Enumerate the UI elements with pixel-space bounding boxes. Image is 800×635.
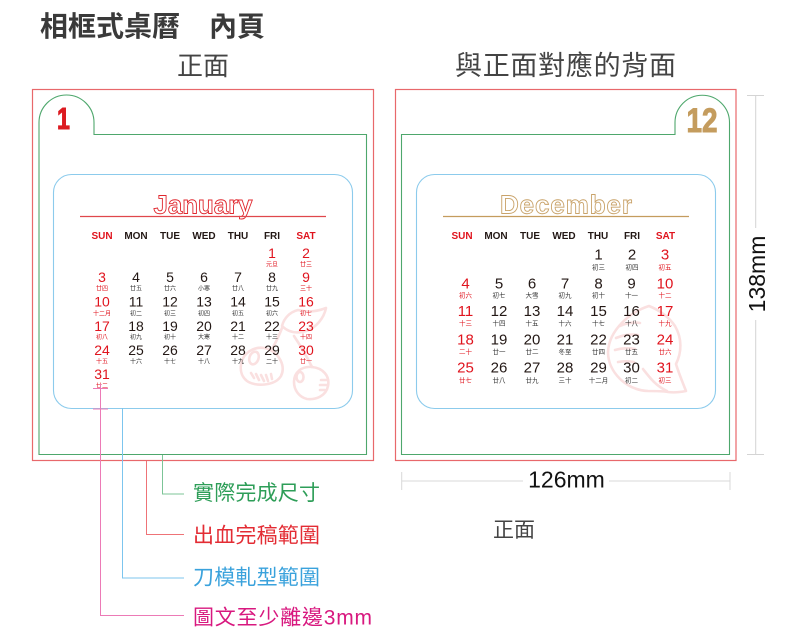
- bleed outline: [32, 90, 374, 460]
- date grid: January: 初九: [130, 333, 142, 341]
- date grid: January: 初四: [198, 310, 210, 318]
- legend: 3mm safety margin: 圖文至少離邊3mm: [193, 606, 372, 630]
- date grid: December: 初三: [658, 376, 672, 384]
- legend: trim size: [162, 455, 320, 505]
- date grid: December: [457, 246, 673, 384]
- date grid: December: 十九: [658, 318, 672, 328]
- date grid: December: 初七: [492, 290, 506, 300]
- watermark: peach: [608, 306, 686, 392]
- date grid: January: 廿一: [300, 358, 312, 366]
- weekday header: SUN: [451, 231, 473, 242]
- date grid: December: 十八: [625, 318, 638, 328]
- date grid: December: 廿九: [526, 376, 539, 384]
- weekday header: FRI: [624, 231, 640, 242]
- date grid: December: 31: [657, 360, 673, 376]
- weekday header: WED: [552, 231, 576, 242]
- date grid: January: 15: [264, 294, 280, 310]
- date grid: December: 8: [594, 276, 603, 292]
- date grid: January: 初五: [232, 310, 244, 318]
- legend: die-cut area: [122, 408, 320, 590]
- date grid: December: 21: [557, 332, 573, 348]
- weekday header: MON: [484, 231, 508, 242]
- date grid: January: 元旦: [266, 262, 278, 268]
- legend: trim size: 實際完成尺寸: [193, 482, 320, 505]
- date grid: December: 12: [491, 303, 507, 320]
- date grid: January: 1: [268, 245, 276, 261]
- date grid: December: 十一: [625, 290, 638, 300]
- date grid: December: 廿一: [492, 347, 506, 356]
- date grid: December: 17: [657, 303, 673, 320]
- date grid: December: 14: [557, 303, 573, 320]
- date grid: December: 20: [524, 332, 540, 348]
- watermark: cherries: [241, 308, 328, 399]
- date grid: December: 10: [657, 276, 673, 292]
- date grid: January: 十九: [232, 358, 244, 366]
- die-cut outline: [416, 174, 716, 408]
- date grid: December: 16: [623, 303, 640, 320]
- date grid: December: 冬至: [558, 347, 572, 356]
- date grid: January: 十二月: [93, 310, 111, 318]
- date grid: December: 4: [461, 276, 470, 292]
- date grid: January: 23: [298, 318, 314, 334]
- weekday header: SAT: [656, 231, 675, 242]
- date grid: January: 十四: [300, 333, 312, 341]
- date grid: December: 十二: [658, 290, 672, 300]
- weekday header: TUE: [520, 231, 540, 242]
- date grid: January: 初二: [130, 310, 142, 318]
- date grid: January: 2: [302, 245, 310, 261]
- date grid: January: 4: [132, 269, 140, 285]
- title: 相框式桌曆: [40, 11, 180, 42]
- date grid: January: 17: [94, 318, 110, 334]
- date grid: December: 二十: [459, 347, 472, 356]
- date grid: December: 7: [561, 276, 569, 292]
- date grid: January: 31: [94, 366, 110, 382]
- trim outline with tab: [402, 95, 730, 454]
- date grid: January: 5: [166, 269, 174, 285]
- date grid: January: 10: [94, 294, 110, 310]
- date grid: December: 十二月: [589, 376, 608, 384]
- date grid: December: 廿八: [492, 376, 506, 384]
- bleed outline: [396, 90, 736, 460]
- date grid: December: 廿五: [625, 347, 638, 356]
- date grid: January: 22: [264, 318, 280, 334]
- date grid: December: 13: [524, 303, 540, 320]
- date grid: December: 初六: [459, 290, 472, 300]
- heading: front side: 正面: [177, 51, 229, 81]
- dimension: width 126mm: 126mm: [528, 467, 605, 493]
- date grid: December: 18: [457, 332, 474, 348]
- date grid: January: 9: [302, 269, 310, 285]
- date grid: December: 9: [627, 276, 636, 292]
- date grid: January: 29: [264, 342, 280, 358]
- date grid: January: 13: [196, 294, 212, 310]
- date grid: December: 24: [657, 332, 673, 348]
- dimension: width 126mm: [402, 467, 730, 493]
- date grid: January: 十八: [198, 358, 210, 366]
- panel: front calendar page: [32, 90, 374, 460]
- date grid: January: 初八: [96, 333, 108, 341]
- date grid: January: 24: [94, 342, 110, 358]
- date grid: January: 廿八: [232, 284, 244, 292]
- date grid: December: 25: [457, 360, 474, 376]
- weekday header: TUE: [160, 231, 180, 242]
- weekday header: THU: [588, 231, 608, 242]
- date grid: January: 廿六: [164, 284, 176, 292]
- date grid: December: 初二: [625, 376, 638, 384]
- heading: matching back side: 與正面對應的背面: [455, 51, 676, 81]
- date grid: December: 十四: [492, 318, 506, 328]
- date grid: January: 初六: [266, 310, 278, 318]
- date grid: January: 大寒: [198, 333, 210, 341]
- weekday header: [91, 231, 316, 242]
- date grid: January: 14: [230, 294, 246, 310]
- date grid: January: 廿九: [266, 284, 278, 292]
- date grid: December: 19: [491, 332, 507, 348]
- date grid: January: 廿三: [300, 260, 312, 268]
- date grid: January: 30: [298, 342, 314, 358]
- caption: front side: 正面: [493, 519, 535, 542]
- date grid: December: 十五: [526, 318, 539, 328]
- weekday header: WED: [192, 231, 216, 242]
- date grid: December: 十七: [592, 318, 606, 328]
- legend: die-cut area: 刀模軋型範圍: [193, 566, 320, 590]
- date grid: December: 十六: [558, 318, 572, 328]
- date grid: January: 十二: [232, 333, 244, 341]
- date grid: January: 7: [234, 269, 242, 285]
- date grid: December: 初四: [626, 262, 638, 272]
- date grid: December: 28: [557, 360, 573, 376]
- date grid: December: 大雪: [526, 290, 539, 300]
- date grid: January: 8: [268, 269, 276, 285]
- date grid: December: 23: [623, 332, 640, 348]
- date grid: January: 28: [230, 342, 246, 358]
- trim outline with tab: [39, 95, 366, 455]
- date grid: January: 初十: [164, 333, 176, 341]
- date grid: January: 20: [196, 318, 212, 334]
- date grid: December: 5: [495, 276, 503, 292]
- weekday header: [451, 231, 675, 242]
- date grid: January: 十六: [130, 358, 142, 366]
- date grid: December: 1: [594, 246, 603, 264]
- date grid: January: 初七: [300, 310, 312, 318]
- date grid: January: 初三: [164, 310, 176, 318]
- date grid: January: 27: [196, 342, 212, 358]
- date grid: January: 廿二: [96, 382, 108, 390]
- title rule: [80, 216, 326, 218]
- date grid: January: 21: [230, 318, 246, 334]
- date grid: December: 初三: [592, 262, 606, 272]
- date grid: January: 6: [200, 269, 208, 285]
- date grid: December: 初五: [658, 262, 672, 272]
- weekday header: THU: [228, 231, 248, 242]
- date grid: December: 廿七: [459, 376, 472, 384]
- date grid: January: 十三: [266, 333, 278, 341]
- date grid: December: 6: [528, 276, 536, 292]
- date grid: January: 12: [162, 294, 178, 310]
- date grid: January: 26: [162, 342, 178, 358]
- weekday header: SUN: [91, 231, 113, 242]
- date grid: December: 十三: [459, 318, 472, 328]
- date grid: January: 11: [129, 294, 143, 310]
- date grid: December: 3: [661, 246, 669, 264]
- date grid: January: 十五: [96, 358, 108, 366]
- date grid: January: 16: [298, 294, 314, 310]
- date grid: January: 3: [98, 269, 106, 285]
- date grid: January: 十七: [164, 358, 176, 366]
- date grid: January: 25: [128, 342, 144, 358]
- date grid: January: 18: [128, 318, 144, 334]
- month number tab: 1: [57, 101, 70, 136]
- dimension: height 138mm: 138mm: [744, 236, 770, 312]
- date grid: December: 11: [458, 303, 473, 320]
- panel: back calendar page: [396, 90, 736, 460]
- date grid: December: 30: [623, 360, 640, 376]
- title: 內頁: [209, 11, 265, 42]
- date grid: December: 15: [590, 303, 607, 320]
- die-cut outline: [54, 174, 352, 408]
- dimension: height 138mm: [744, 95, 770, 454]
- weekday header: MON: [124, 231, 148, 242]
- date grid: December: 26: [491, 360, 507, 376]
- weekday header: FRI: [264, 231, 280, 242]
- title rule: [443, 216, 689, 218]
- month title: January: January: [154, 192, 253, 220]
- weekday header: SAT: [296, 231, 316, 242]
- date grid: January: [93, 245, 314, 390]
- date grid: January: 二十: [266, 358, 278, 366]
- date grid: December: 初十: [592, 290, 606, 300]
- date grid: December: 2: [628, 246, 636, 264]
- date grid: December: 22: [590, 332, 607, 348]
- date grid: December: 27: [524, 360, 540, 376]
- legend: 3mm safety margin: [93, 384, 372, 630]
- month number tab: 12: [686, 101, 718, 140]
- legend: bleed area: [146, 461, 320, 548]
- date grid: December: 三十: [558, 376, 572, 384]
- date grid: January: 小寒: [198, 284, 210, 292]
- date grid: January: 19: [162, 318, 178, 334]
- date grid: December: 29: [590, 360, 607, 376]
- date grid: January: 廿四: [96, 284, 108, 292]
- date grid: December: 初九: [558, 290, 572, 300]
- date grid: December: 廿二: [526, 347, 539, 356]
- legend: bleed area: 出血完稿範圍: [193, 524, 320, 548]
- date grid: December: 廿六: [658, 347, 672, 356]
- month title: December: December: [500, 190, 632, 220]
- date grid: January: 三十: [300, 284, 312, 292]
- date grid: January: 廿五: [130, 284, 142, 292]
- date grid: December: 廿四: [592, 347, 605, 356]
